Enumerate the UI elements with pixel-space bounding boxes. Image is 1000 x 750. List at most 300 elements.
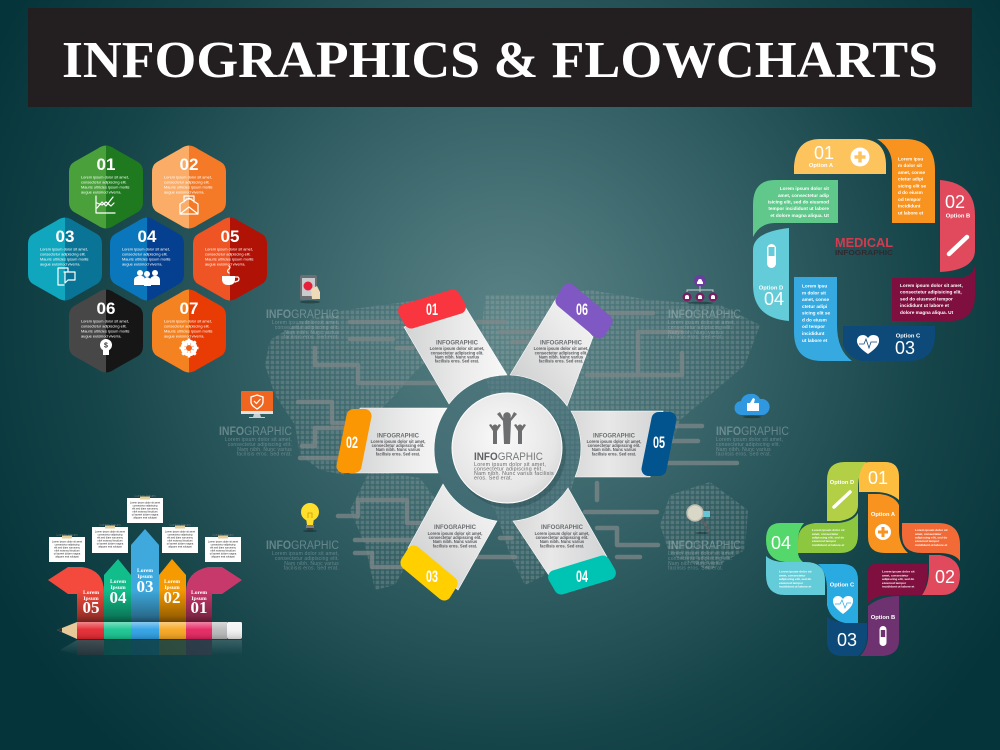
note 5: Lorem Ipsum (213, 533, 233, 537)
hexagon 01: consectetur adipiscing elit. (81, 180, 127, 184)
numbers and options: 03 (837, 630, 857, 650)
text: orange: d do eiusm (898, 190, 923, 195)
petal 05: Lorem ipsum dolor sit amet, (587, 439, 641, 444)
hexagon 04: 04 (138, 227, 157, 246)
text: light green: adipiscing elit, sed do (812, 536, 844, 540)
note 2: aliquam erat volutpat (98, 546, 122, 548)
petal 04 (513, 488, 609, 588)
hub text: Lorem ipsum dolor sit amet, (474, 462, 546, 468)
icon: heart (857, 335, 879, 354)
segment: 03 navy (827, 617, 867, 656)
hexagon 03: consectetur adipiscing elit. (40, 252, 86, 256)
note 2: ut laoreet dolore magna (97, 542, 124, 546)
segment: option C blue (818, 564, 858, 623)
icon: thermometer (949, 237, 967, 254)
text: light green (812, 528, 844, 547)
petal 03: consectetur adipiscing elit. (429, 535, 481, 540)
hexagon 07: augue euismod viverra. (164, 334, 204, 338)
text: maroon: incididunt ut labore et (900, 303, 949, 308)
watermark label: bottom left (266, 540, 339, 572)
watermark label: top left: Lorem ipsum dolor sit amet, (272, 320, 339, 326)
hexagon 04: augue euismod viverra. (122, 262, 162, 266)
segment: light green text (798, 513, 858, 553)
hexagon 02 (152, 146, 226, 228)
subheading: infographic: INFOGRAPHIC (835, 250, 893, 257)
hexagon 04: Mauris ultricies ipsum mollis (122, 256, 170, 262)
petal 04: facilisis eros. Sed erat. (540, 544, 584, 548)
numbers and options: Option B (871, 615, 895, 621)
watermark label: bottom right: Nam nibh. Nunc varius (668, 561, 723, 567)
hexagon 03: 03 (56, 227, 74, 246)
segment: green text (753, 180, 838, 237)
text: green: Lorem ipsum dolor sit (780, 186, 829, 191)
petal 05 (571, 411, 670, 477)
hub text (474, 462, 554, 482)
note 5 (205, 533, 241, 562)
note 2: consectetur adipiscing (98, 534, 123, 536)
text: coral: Lorem ipsum dolor sit (915, 528, 948, 532)
arrow labels: Lorem (164, 579, 180, 585)
petal 05: consectetur adipiscing elit. (588, 443, 640, 448)
hub text: consectetur adipiscing elit. (474, 466, 543, 472)
note 3: ut laoreet dolore magna (132, 514, 159, 516)
petal 02: Nam nibh. Nunc varius (376, 447, 421, 452)
hexagon 05: 05 (221, 227, 239, 246)
note 2: nibh euismod tincidunt (98, 540, 123, 542)
watermark label: top right: Lorem ipsum dolor sit amet, (668, 320, 735, 326)
note 2: elit sed diam nonummy (97, 536, 124, 540)
numbers and options: Option A (809, 163, 834, 169)
text: maroon (882, 570, 914, 588)
hexagon 03: augue euismod viverra. (40, 262, 80, 266)
icon: magnifier (687, 505, 710, 534)
tab 02 (344, 416, 364, 466)
text: orange: Lorem ipsu (898, 156, 923, 162)
text: teal: eiusmod tempor (779, 581, 804, 585)
arrow labels (82, 568, 208, 617)
segment: option A orange (868, 494, 908, 553)
text: blue: incididunt (802, 331, 825, 336)
petal 05: INFOGRAPHIC (593, 434, 636, 440)
watermark label: middle left: INFOGRAPHIC (219, 426, 292, 438)
note 3: elit sed diam nonummy (132, 508, 159, 510)
petal 06: Lorem ipsum dolor sit amet, (534, 346, 588, 351)
watermark label: bottom left: INFOGRAPHIC (266, 540, 339, 552)
hexagon 04: Lorem ipsum dolor sit amet, (122, 246, 170, 252)
petal 04: Lorem ipsum dolor sit amet, (535, 531, 589, 536)
note 4: nibh euismod tincidunt (168, 540, 193, 542)
petal 01: Lorem ipsum dolor sit amet, (430, 346, 484, 351)
text: teal: incididunt ut labore et (779, 584, 811, 588)
panel: pencil arrows infographic (48, 494, 242, 655)
watermark label: top left: consectetur adipiscing elit. (275, 325, 339, 331)
icon: pill (880, 626, 886, 646)
note 1: ut laoreet dolore magna (54, 552, 81, 556)
hub text: eros. Sed erat. (474, 476, 512, 482)
text: blue: ut labore et (802, 338, 828, 343)
petal 01: Nam nibh. Nunc varius (435, 354, 480, 360)
segment: coral text (902, 523, 960, 561)
arrow labels: Ipsum (137, 574, 153, 580)
watermark label: bottom right: INFOGRAPHIC (668, 540, 741, 552)
text: coral: incididunt ut labore et (915, 543, 947, 547)
note 1: Lorem ipsum dolor sit amet (52, 540, 82, 544)
watermark label: top left: INFOGRAPHIC (266, 309, 339, 321)
watermark label: middle left (219, 426, 292, 458)
note 1: Lorem Ipsum (57, 533, 77, 537)
segment: blue text (794, 277, 852, 361)
text: maroon: incididunt ut labore et (882, 584, 914, 588)
watermark label: bottom right: Lorem ipsum dolor sit amet, (668, 551, 735, 557)
icon: cloud thumbs up (734, 394, 770, 418)
petal 06: facilisis eros. Sed erat. (539, 358, 583, 364)
hexagon 05: Mauris ultricies ipsum mollis (205, 256, 253, 262)
arrow labels: Ipsum (83, 596, 99, 602)
title banner (28, 8, 972, 107)
note 3: Lorem ipsum dolor sit amet (130, 502, 160, 504)
arrow labels: 03 (136, 577, 154, 596)
text: teal (779, 570, 812, 588)
text: coral: amet, consectetur (915, 532, 942, 536)
hexagon 07 (152, 290, 226, 372)
text: orange: sicing elit se (898, 184, 927, 188)
numbers and options: 02 (935, 567, 955, 587)
watermark label: top right: INFOGRAPHIC (668, 309, 741, 321)
note 5: ut laoreet dolore magna (210, 552, 237, 556)
numbers and options: Option C (830, 582, 855, 588)
petal 01 (404, 296, 507, 404)
numbers and options: 02 (945, 192, 965, 212)
hexagon 04: consectetur adipiscing elit. (122, 252, 168, 256)
panel: medical ring flowchart (753, 139, 975, 361)
arrow 05 red (48, 567, 104, 622)
hexagon 07: Mauris ultricies ipsum mollis (164, 328, 212, 334)
hexagon 05 (193, 218, 267, 300)
watermark label: top left: Nam nibh. Nunc varius (284, 330, 339, 336)
hexagon 05: Lorem ipsum dolor sit amet, (205, 246, 253, 252)
icon: plus (875, 524, 891, 540)
numbers and options: Option D (830, 480, 854, 486)
watermark label: middle left: consectetur adipiscing elit. (228, 442, 292, 448)
petal 02: facilisis eros. Sed erat. (376, 452, 420, 456)
petal 03 (407, 484, 497, 594)
note 3: aliquam erat volutpat (133, 516, 157, 520)
text: blue: m dolor sit (802, 290, 826, 296)
central disc (452, 393, 562, 503)
text: coral: eiusmod tempor (915, 539, 940, 543)
tab 04 (555, 562, 609, 588)
hub text: Nam nibh. Nunc varius facilisis (474, 471, 554, 477)
number 03: 03 (426, 568, 438, 586)
segment: orange text (877, 139, 935, 223)
watermark label: top right (668, 309, 741, 340)
petal 06: Nam nibh. Nunc varius (539, 354, 584, 360)
arrow labels: Lorem (83, 590, 99, 596)
segment: option C navy (843, 326, 935, 361)
note 4: aliquam erat volutpat (168, 546, 192, 548)
numbers and options: Option A (871, 512, 896, 518)
icon: thermometer (834, 492, 850, 507)
text: green: et dolore magna aliqua. Ut (770, 213, 829, 218)
arrow labels: Lorem (191, 590, 207, 596)
text: orange: ctetur adipi (898, 176, 923, 182)
text: blue: d do eiusm (802, 318, 827, 322)
watermark label: top right: Nam nibh. Nunc varius (668, 330, 723, 336)
arrow labels: Lorem (137, 568, 153, 574)
watermark label: middle right (716, 426, 789, 458)
note 1: consectetur adipiscing (55, 544, 80, 546)
panel: plus-shaped flowchart (766, 462, 960, 656)
note 4 (162, 523, 198, 553)
text: maroon (900, 283, 963, 315)
watermark label: middle left: Nam nibh. Nunc varius (237, 447, 292, 453)
note 1 (49, 533, 85, 562)
hexagon 01 (69, 146, 143, 228)
numbers and options (771, 468, 955, 650)
number 04: 04 (576, 568, 589, 586)
tab 03 (407, 552, 451, 594)
note 1: nibh euismod tincidunt (55, 550, 80, 552)
hexagon 06: augue euismod viverra. (81, 334, 121, 338)
tab 05 (648, 419, 670, 469)
icon: pill (767, 244, 776, 268)
hub ring (434, 375, 580, 521)
numbers and options: 04 (771, 533, 791, 553)
text: orange (898, 156, 927, 216)
text: orange: incididunt (898, 204, 921, 208)
text: maroon: eiusmod tempor (882, 581, 907, 585)
segment: 04 green (766, 523, 804, 562)
text: green: amet, consectetur adip (778, 193, 829, 198)
numbers and options: 03 (895, 338, 915, 358)
hexagon 07: consectetur adipiscing elit. (164, 324, 210, 328)
note 4: Lorem ipsum dolor sit amet (165, 530, 195, 534)
hexagon 05: consectetur adipiscing elit. (205, 252, 251, 256)
dotted world map (265, 290, 760, 590)
hexagon 06: consectetur adipiscing elit. (81, 324, 127, 328)
arrow labels: Ipsum (110, 585, 126, 591)
petal 04: Nam nibh. Nunc varius (540, 539, 585, 544)
icon: people (489, 412, 526, 444)
watermark label: bottom right: facilisis eros. Sed erat. (668, 566, 723, 572)
note 3: nibh euismod tincidunt (133, 510, 158, 514)
watermark label: middle right: Nam nibh. Nunc varius (716, 447, 771, 453)
number 02: 02 (346, 434, 358, 452)
arrow labels: Lorem (110, 579, 126, 585)
text: green: tempor incididunt ut labore (768, 206, 829, 211)
hexagon 01: Lorem ipsum dolor sit amet, (81, 174, 129, 180)
hexagon 06: Mauris ultricies ipsum mollis (81, 328, 129, 334)
hexagon 02: Mauris ultricies ipsum mollis (164, 184, 212, 190)
numbers and options: Option B (946, 214, 970, 220)
petal 06: INFOGRAPHIC (540, 340, 583, 346)
disc shadow (454, 396, 566, 508)
number 06: 06 (576, 301, 588, 319)
pencil (57, 622, 242, 639)
petal 01: facilisis eros. Sed erat. (435, 358, 479, 364)
watermark label: middle right: consectetur adipiscing elit. (716, 442, 780, 448)
watermark label: middle right: Lorem ipsum dolor sit amet, (716, 437, 783, 443)
text: maroon: consectetur adipisicing elit, (900, 290, 962, 294)
watermark label: bottom right: consectetur adipiscing elit. (668, 556, 732, 562)
watermark label: bottom left: Nam nibh. Nunc varius (284, 561, 339, 567)
watermark label: bottom right (668, 540, 741, 572)
tab 06 (562, 290, 606, 332)
watermark label: top left: facilisis eros. Sed erat. (284, 334, 339, 340)
watermark label: middle right: INFOGRAPHIC (716, 426, 789, 438)
icon: light bulb (301, 503, 319, 532)
arrow labels: 02 (164, 588, 180, 607)
note 1: aliquam erat volutpat (55, 556, 79, 558)
segment: option A yellow (794, 139, 886, 174)
text: teal: Lorem ipsum dolor sit (779, 570, 812, 574)
petal 04: INFOGRAPHIC (541, 525, 584, 531)
arrow 01 pink (186, 567, 242, 622)
petal 02: Lorem ipsum dolor sit amet, (371, 439, 425, 444)
text: orange: ut labore et (898, 210, 924, 216)
segment: option D lime (827, 462, 866, 521)
segment: option B red (940, 180, 975, 272)
text: orange: od tempor (898, 197, 921, 202)
note 2 (92, 523, 128, 553)
icon: plus (850, 148, 870, 166)
watermark label: middle right: facilisis eros. Sed erat. (716, 452, 771, 458)
arrow labels: Ipsum (164, 585, 180, 591)
watermark label: top right: consectetur adipiscing elit. (668, 325, 732, 331)
numbers and options: 01 (814, 143, 834, 163)
text: blue: Lorem ipsu (802, 284, 827, 288)
arrow labels: 05 (82, 598, 100, 617)
note 5: nibh euismod tincidunt (211, 550, 236, 552)
number 01: 01 (426, 301, 438, 319)
heading: medical: MEDICAL (835, 235, 893, 250)
pencil reflection (60, 640, 242, 655)
note 3: consectetur adipiscing (133, 504, 158, 508)
hexagon 06: $ (104, 342, 108, 350)
watermark label: middle left: facilisis eros. Sed erat. (237, 452, 292, 458)
note 5: elit sed diam nonummy (210, 546, 237, 550)
panel: central hub diagram (344, 290, 670, 594)
hexagon 02: 02 (180, 155, 198, 174)
petal 03: Lorem ipsum dolor sit amet, (428, 531, 482, 536)
text: light green: eiusmod tempor (812, 539, 837, 543)
segment: teal text (766, 556, 825, 595)
numbers and options: Option C (896, 334, 921, 340)
text: maroon: adipiscing elit, sed do (882, 577, 914, 581)
petal 01: consectetur adipiscing elit. (431, 350, 483, 356)
text: light green: Lorem ipsum dolor sit (812, 528, 844, 532)
text: blue: od tempor (802, 324, 825, 329)
note 4: elit sed diam nonummy (167, 536, 194, 540)
circuit lines (298, 313, 737, 567)
hexagon 01: Mauris ultricies ipsum mollis (81, 184, 129, 190)
petal 06 (510, 290, 606, 406)
petal 04: consectetur adipiscing elit. (536, 535, 588, 540)
number 05: 05 (653, 434, 665, 452)
arrow 02 orange (159, 559, 186, 622)
petal 05: facilisis eros. Sed erat. (592, 452, 636, 456)
hexagon 06: Lorem ipsum dolor sit amet, (81, 318, 129, 324)
hexagon 06 (69, 290, 143, 372)
title: INFOGRAPHICS & FLOWCHARTS (62, 32, 938, 89)
arrow labels: Ipsum (191, 596, 207, 602)
text: light green: incididunt ut labore et (812, 543, 844, 547)
tab 01 (405, 296, 459, 322)
text: maroon: Lorem ipsum dolor sit (882, 570, 914, 574)
watermark label: bottom left: consectetur adipiscing elit. (275, 556, 339, 562)
watermark label: top left (266, 309, 339, 340)
note 4: ut laoreet dolore magna (167, 542, 194, 546)
petal 02 (344, 408, 447, 473)
hexagon 05: augue euismod viverra. (205, 262, 245, 266)
segment: 02 red (922, 555, 960, 595)
text: teal: amet, consectetur (779, 573, 806, 577)
icon: monitor shield (241, 391, 273, 418)
hexagon 02: Lorem ipsum dolor sit amet, (164, 174, 212, 180)
petal 05: Nam nibh. Nunc varius (592, 447, 637, 452)
text: teal: adipiscing elit, sed do (779, 577, 811, 581)
text: coral (915, 528, 948, 547)
segment: 01 yellow (859, 462, 899, 500)
petal 03: facilisis eros. Sed erat. (433, 544, 477, 548)
segment: option D teal (753, 228, 789, 321)
panel: hexagon infographic (28, 146, 267, 372)
numbers and options: Option D (759, 286, 783, 292)
text: orange: m dolor sit (898, 163, 922, 168)
petal 02: consectetur adipiscing elit. (372, 443, 424, 448)
arrow shading (77, 590, 212, 622)
hexagon 02: consectetur adipiscing elit. (164, 180, 210, 184)
text: maroon: sed do eiusmod tempor (900, 296, 953, 302)
arrow 04 green (104, 559, 131, 622)
numbers and options: 04 (764, 289, 784, 309)
hexagon 03: Mauris ultricies ipsum mollis (40, 256, 88, 262)
text: green: isicing elit, sed do eiusmod (768, 200, 829, 204)
segment: maroon text (892, 263, 975, 321)
petal 03: INFOGRAPHIC (434, 525, 477, 531)
note 2: Lorem Ipsum (100, 523, 120, 527)
note 5: consectetur adipiscing (211, 544, 236, 546)
hexagon 03 (28, 218, 102, 300)
petal 06: consectetur adipiscing elit. (535, 350, 587, 356)
numbers and options (759, 143, 970, 358)
note 5: aliquam erat volutpat (211, 556, 235, 558)
note 5: Lorem ipsum dolor sit amet (208, 540, 238, 544)
icon: heart (833, 596, 853, 614)
numbers and options: 01 (868, 468, 888, 488)
hexagon 01: augue euismod viverra. (81, 190, 121, 194)
icon: phone touch (300, 275, 320, 304)
text: maroon: amet, consectetur (882, 573, 909, 577)
watermark label: middle left: Lorem ipsum dolor sit amet, (225, 437, 292, 443)
watermark label: bottom left: Lorem ipsum dolor sit amet, (272, 551, 339, 557)
segment: maroon text (868, 564, 928, 603)
note 4: Lorem Ipsum (170, 523, 190, 527)
text: blue: ctetur adipi (802, 304, 827, 309)
icon: network hierarchy (682, 275, 718, 304)
petal 01: INFOGRAPHIC (436, 340, 479, 346)
hexagon 02: augue euismod viverra. (164, 190, 204, 194)
note 3 (127, 494, 163, 523)
watermark label: bottom left: facilisis eros. Sed erat. (284, 566, 339, 572)
segment: option B purple (860, 596, 899, 656)
arrow labels: 01 (190, 598, 208, 617)
hexagon 03: Lorem ipsum dolor sit amet, (40, 246, 88, 252)
note 4: consectetur adipiscing (168, 534, 193, 536)
arrow labels: 04 (110, 588, 127, 607)
petal 03: Nam nibh. Nunc varius (433, 539, 478, 544)
arrow 03 blue (131, 529, 159, 622)
